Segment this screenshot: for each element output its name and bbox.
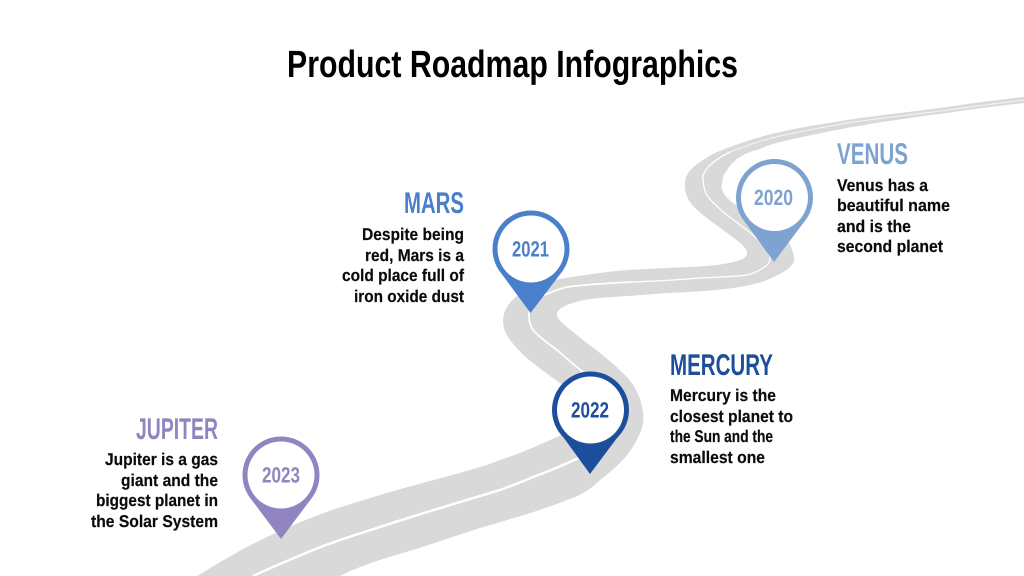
text block: Venus: Venus has a <box>837 176 928 195</box>
text block: Mercury: smallest one <box>670 448 765 467</box>
text block: Mars: cold place full of <box>342 266 464 285</box>
pin: 2022 Mercury <box>552 372 629 474</box>
text block: Jupiter: giant and the <box>121 471 218 490</box>
text block: Mars: iron oxide dust <box>354 287 464 306</box>
text block: Mercury: Mercury is the <box>670 386 776 405</box>
text block: Venus: VENUS <box>837 138 908 171</box>
text block: Jupiter <box>91 413 218 531</box>
text block: Jupiter: the Solar System <box>91 512 218 531</box>
text block: Mars: MARS <box>404 187 464 220</box>
text block: Mars: Despite being <box>362 225 464 244</box>
text block: Mercury: closest planet to <box>670 407 793 426</box>
text block: Mercury: the Sun and the <box>670 427 773 446</box>
text block: Venus: second planet <box>837 237 943 256</box>
pin: 2020 Venus: 2020 <box>754 185 793 210</box>
winding road <box>197 97 1024 576</box>
text block: Jupiter: JUPITER <box>136 413 218 446</box>
pin: 2023 Jupiter <box>242 436 320 539</box>
text block: Mercury: MERCURY <box>670 349 773 382</box>
text block: Mars <box>342 187 464 306</box>
text block: Venus: and is the <box>837 217 911 236</box>
text block: Mars: red, Mars is a <box>365 246 464 265</box>
pin: 2020 Venus <box>736 159 813 262</box>
pin: 2021 Mars: 2021 <box>512 236 549 262</box>
pin: 2021 Mars <box>492 210 570 313</box>
text block: Mercury <box>670 349 793 467</box>
text block: Jupiter: Jupiter is a gas <box>105 450 218 469</box>
pin: 2022 Mercury: 2022 <box>571 398 609 422</box>
pin: 2023 Jupiter: 2023 <box>262 462 300 488</box>
text block: Venus: beautiful name <box>837 196 950 215</box>
title: Product Roadmap Infographics <box>287 44 738 86</box>
text block: Jupiter: biggest planet in <box>96 491 218 510</box>
text block: Venus <box>837 138 950 256</box>
